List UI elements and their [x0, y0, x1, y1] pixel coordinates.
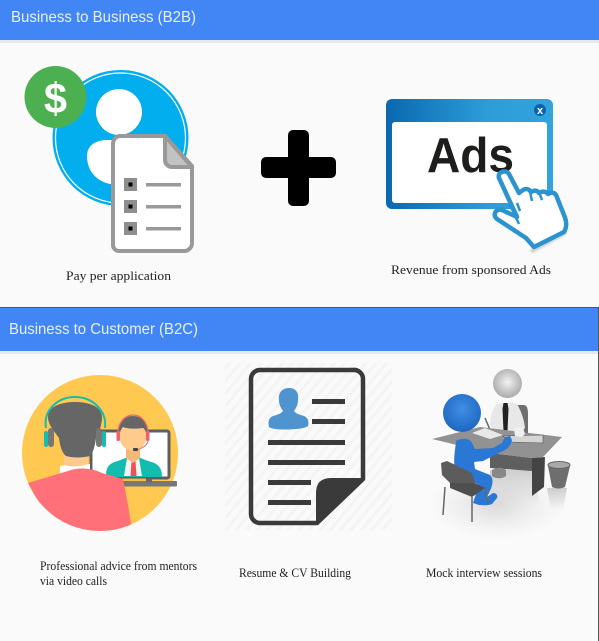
- interviewer figure: [485, 369, 528, 437]
- caption: mock interview sessions: Mock interview sessions: [426, 565, 542, 580]
- chair: [441, 461, 488, 522]
- header: Business to Business: Business to Business (B2B): [11, 9, 196, 26]
- icon: resume document: [225, 363, 392, 530]
- icon: plus: [261, 130, 336, 206]
- close button: [534, 104, 546, 117]
- icon: mock interview scene: [427, 369, 570, 540]
- header: Business to Business: [0, 0, 599, 43]
- ad window frame: [386, 99, 553, 209]
- icon: application document: [113, 136, 192, 251]
- pointing hand: [495, 171, 568, 253]
- ads word: Ads: [427, 129, 514, 183]
- mentee figure: [28, 397, 131, 534]
- caption: professional advice: Professional advice from mentors: [40, 558, 197, 573]
- icon: sponsored ads window: [386, 99, 568, 253]
- close button: x: [537, 105, 544, 117]
- caption: revenue from sponsored ads: Revenue from sponsored Ads: [391, 262, 551, 277]
- icon: dollar badge: $: [44, 75, 67, 123]
- resume photo silhouette: [268, 388, 309, 430]
- header: Business to Customer: Business to Customer (B2C): [9, 321, 198, 338]
- laptop with mentor: [91, 415, 177, 486]
- blue figure on chair: [441, 394, 512, 522]
- icon: dollar badge: [24, 66, 86, 128]
- caption: resume and cv building: Resume & CV Building: [239, 565, 351, 580]
- caption: pay per application: Pay per application: [66, 268, 172, 283]
- icon: user circle: [52, 70, 188, 206]
- icon: pay per application: [24, 66, 192, 251]
- caption: professional advice: via video calls: [40, 573, 107, 588]
- waste basket: [548, 462, 570, 488]
- icon: video call with mentor: [22, 375, 178, 534]
- blue figure body: [454, 436, 512, 505]
- header: Business to Customer: [0, 307, 599, 641]
- desk: [432, 427, 562, 496]
